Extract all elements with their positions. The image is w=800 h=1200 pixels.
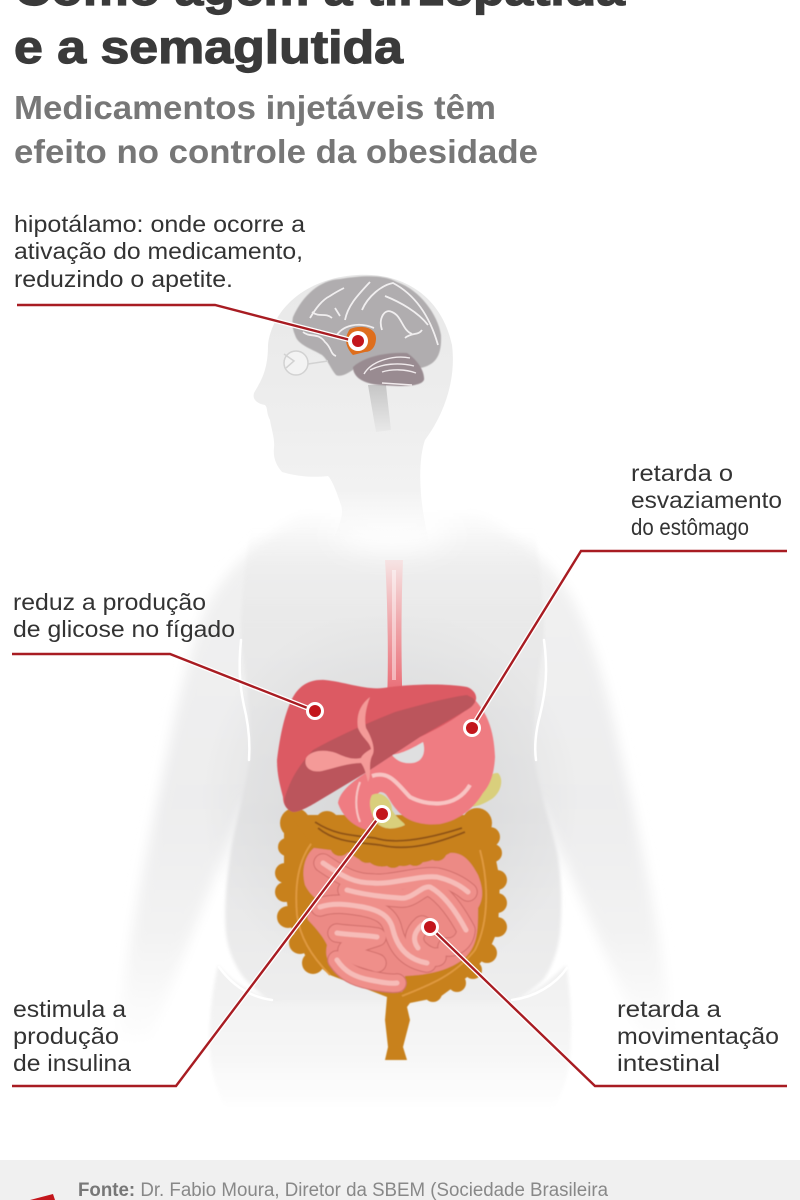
label: movimentação	[617, 1023, 779, 1049]
organs	[275, 680, 507, 1060]
subtitle	[14, 89, 538, 170]
eye and optic nerve	[284, 351, 328, 375]
stomach	[338, 700, 495, 830]
label: ativação do medicamento,	[14, 238, 303, 264]
pancreas	[370, 794, 405, 828]
leader line	[472, 551, 787, 727]
marker	[463, 719, 481, 737]
colon	[275, 808, 507, 1060]
leader line	[430, 927, 787, 1086]
marker	[421, 918, 439, 936]
subtitle: Medicamentos injetáveis têm	[14, 89, 496, 126]
head silhouette	[254, 275, 453, 545]
icon: brain	[284, 276, 441, 432]
callout: hipotálamo	[14, 211, 368, 351]
label: de insulina	[13, 1050, 131, 1076]
marker	[306, 702, 324, 720]
callout: estômago	[463, 460, 787, 737]
title	[14, 0, 625, 73]
callout: intestino	[421, 918, 787, 1086]
label	[14, 211, 305, 292]
marker	[373, 805, 391, 823]
title: e a semaglutida	[14, 21, 403, 73]
callout: fígado	[12, 589, 324, 720]
liver ligaments	[305, 697, 374, 782]
label: retarda a	[617, 996, 721, 1022]
leader line	[17, 305, 358, 342]
body silhouette	[118, 499, 672, 1130]
label: produção	[13, 1023, 119, 1049]
leader line	[12, 654, 315, 711]
arms and shoulders	[118, 515, 672, 1040]
label: de glicose no fígado	[13, 616, 235, 642]
hypothalamus highlight	[346, 327, 376, 355]
label: reduzindo o apetite.	[14, 266, 233, 292]
transverse colon	[290, 815, 484, 868]
liver	[277, 680, 476, 812]
subtitle: efeito no controle da obesidade	[14, 133, 538, 170]
cerebellum	[353, 353, 424, 386]
intestine loops	[320, 863, 468, 983]
esophagus	[385, 560, 403, 722]
label: retarda o	[631, 460, 733, 486]
label: reduz a produção	[13, 589, 206, 615]
torso inner shading	[200, 610, 580, 990]
icon: logo arrow	[30, 1194, 55, 1200]
pancreas tail	[466, 773, 501, 807]
liver lower shaded lobe	[284, 695, 475, 812]
leader line	[12, 813, 382, 1086]
label	[13, 589, 235, 642]
label	[631, 460, 782, 540]
brainstem	[368, 385, 391, 432]
brain folds	[303, 282, 438, 356]
colon haustra	[275, 808, 507, 1002]
label: do estômago	[631, 514, 749, 540]
label	[617, 996, 779, 1076]
hips	[210, 965, 571, 1130]
neck base highlight	[332, 499, 452, 551]
label: hipotálamo: onde ocorre a	[14, 211, 305, 237]
small intestine	[303, 848, 482, 992]
footer panel	[0, 1160, 800, 1200]
callout: pâncreas	[12, 805, 391, 1086]
brain cerebrum	[292, 276, 441, 376]
label: esvaziamento	[631, 487, 782, 513]
marker	[348, 331, 368, 351]
torso	[225, 530, 561, 1002]
label: intestinal	[617, 1050, 720, 1076]
label	[13, 996, 131, 1076]
waist highlights	[219, 640, 567, 1000]
label: estimula a	[13, 996, 126, 1022]
